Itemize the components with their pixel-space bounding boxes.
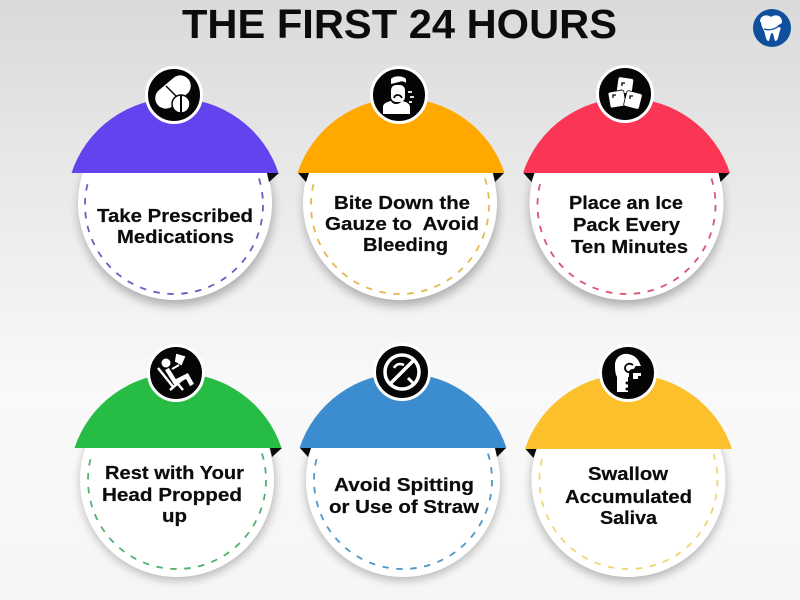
text: bite down the gauze (325, 193, 479, 255)
panel: bite down the gauze (298, 68, 504, 306)
text: bite down the gauze: Bleeding (363, 235, 448, 255)
text: swallow accumulated saliva: Accumulated (565, 487, 692, 507)
text: swallow accumulated saliva (565, 464, 692, 528)
panel: take prescribed medications (72, 68, 279, 306)
icon: ice cubes (598, 66, 652, 122)
text: rest with head propped up: up (162, 506, 187, 526)
icon: head swallowing (600, 346, 656, 400)
panel: place an ice pack (523, 66, 730, 306)
text: avoid spitting or straw: or Use of Straw (329, 497, 480, 517)
text: bite down the gauze: Gauze to Avoid (325, 214, 479, 234)
text: rest with head propped up (102, 463, 244, 526)
icon: pills (146, 68, 202, 122)
text: take prescribed medications: Take Prescribed (97, 206, 253, 226)
text: avoid spitting or straw: Avoid Spitting (334, 475, 474, 495)
text: rest with head propped up: Rest with Your (105, 463, 244, 483)
text: take prescribed medications (97, 206, 253, 247)
text: bite down the gauze: Bite Down the (334, 193, 470, 213)
icon: person reclining (148, 346, 204, 400)
text: swallow accumulated saliva: Saliva (600, 508, 658, 528)
icon: person biting gauze (372, 68, 426, 122)
text: rest with head propped up: Head Propped (102, 485, 242, 505)
icon: no spitting (374, 344, 430, 400)
text: take prescribed medications: Medications (117, 227, 234, 247)
text: place an ice pack: Ten Minutes (571, 237, 688, 257)
panel: swallow accumulated saliva (525, 346, 732, 581)
text: place an ice pack: Pack Every (573, 215, 680, 235)
text: swallow accumulated saliva: Swallow (588, 464, 669, 484)
logo: tooth with plane (753, 9, 791, 47)
panel: avoid spitting or straw (300, 344, 506, 580)
text: avoid spitting or straw (329, 475, 480, 517)
panel: rest with head propped up (74, 346, 282, 580)
text: place an ice pack (569, 193, 688, 257)
title: THE FIRST 24 HOURS (182, 1, 617, 47)
text: place an ice pack: Place an Ice (569, 193, 683, 213)
